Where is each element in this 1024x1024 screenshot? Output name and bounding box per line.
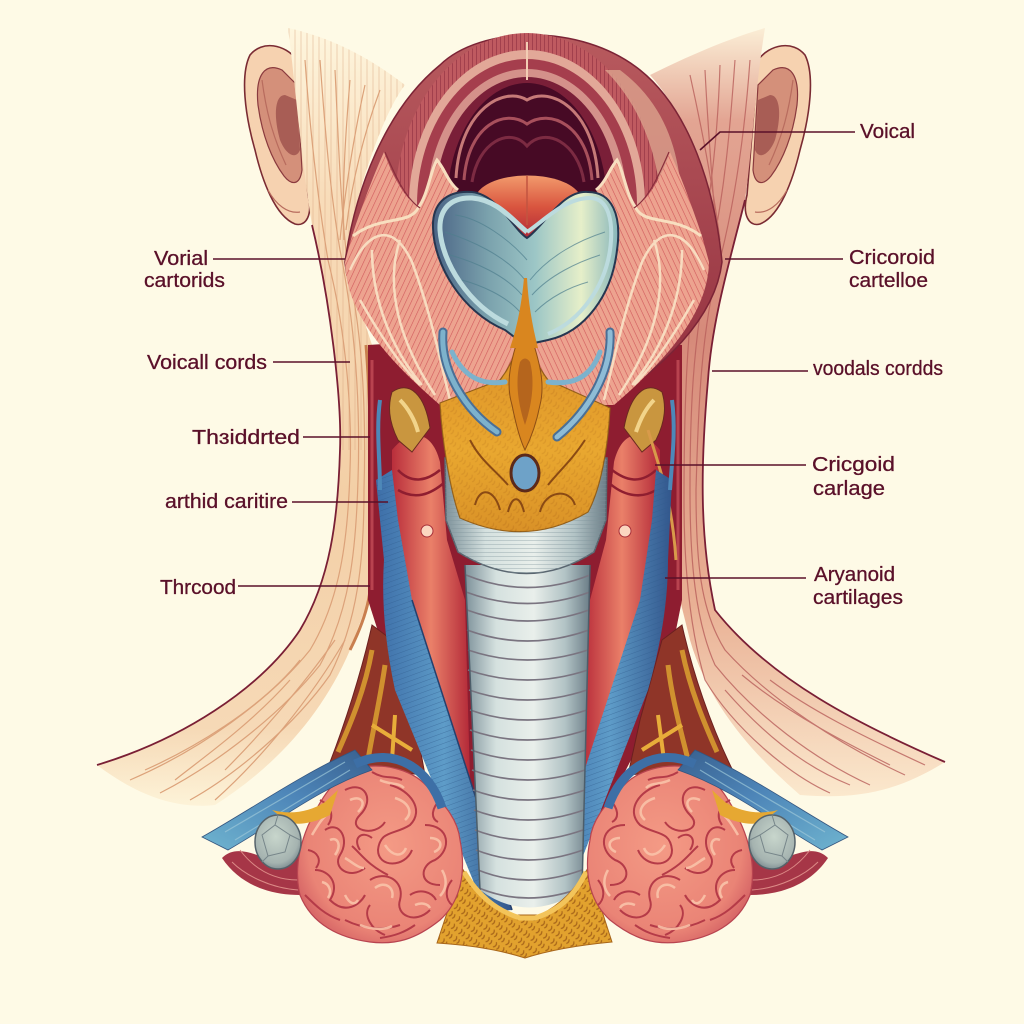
label: Vorial cartorids: Vorial (154, 248, 208, 270)
thyroid lobe left (298, 766, 463, 943)
icon: left ear (245, 46, 310, 224)
blue curved ducts (443, 332, 610, 437)
label: Cricoid carlage: carlage (813, 478, 885, 500)
grey nodule (255, 815, 301, 869)
left neck band (97, 28, 405, 806)
leader lines (213, 132, 855, 586)
icon: right ear (745, 46, 810, 224)
blue lateral vessel left (202, 750, 442, 869)
label: Aryanoid cartilages: cartilages (813, 587, 903, 609)
label: Cricoid carlage: Cricgoid (812, 454, 895, 476)
dark fringe left (222, 850, 300, 895)
muscle left (390, 388, 470, 780)
label: Cricoid carlage (812, 454, 895, 500)
label: voodals cordds: voodals cordds (813, 358, 943, 380)
label: Thrcood: Thrcood (160, 577, 236, 599)
label: arthid caritire: arthid caritire (165, 491, 288, 513)
blue shield cartilage (433, 192, 618, 348)
label: Vorial cartorids (144, 248, 225, 292)
silver cricoid ring (445, 458, 607, 574)
label: Cricoroid cartelloe (849, 247, 935, 292)
trachea (465, 565, 590, 908)
blue oval node (511, 455, 539, 491)
gold connector (272, 790, 338, 824)
left neck panel (345, 152, 524, 405)
label: Cricoroid cartelloe: Cricoroid (849, 247, 935, 269)
lateral gold tissue right (628, 625, 735, 775)
label: Thyidldrted: Thɜiddrted (192, 427, 300, 449)
label: Voical: Voical (860, 121, 915, 143)
label: Vorial cartorids: cartorids (144, 270, 225, 292)
right upper detail (605, 70, 680, 190)
throat arches (395, 33, 659, 377)
label: Aryanoid cartilages (813, 564, 903, 609)
gold base plate (437, 868, 612, 958)
lateral gold tissue left (325, 625, 425, 775)
muscle right (584, 388, 676, 800)
tongue (478, 176, 578, 245)
blue lateral vessel right (608, 750, 848, 869)
label: Aryanoid cartilages: Aryanoid (814, 564, 895, 586)
right neck band (650, 28, 945, 796)
label: Cricoroid cartelloe: cartelloe (849, 270, 928, 292)
head cavity dome (345, 33, 722, 400)
label: Voicall cords: Voicall cords (147, 352, 267, 374)
right neck panel (530, 152, 709, 405)
blue vessel left (376, 400, 512, 912)
dark fringe right (750, 850, 828, 895)
deep tissue behind the larynx (368, 340, 682, 820)
gold thyroid cartilage (440, 330, 610, 532)
blue vessel right (548, 400, 674, 884)
thyroid lobe right (587, 766, 752, 943)
